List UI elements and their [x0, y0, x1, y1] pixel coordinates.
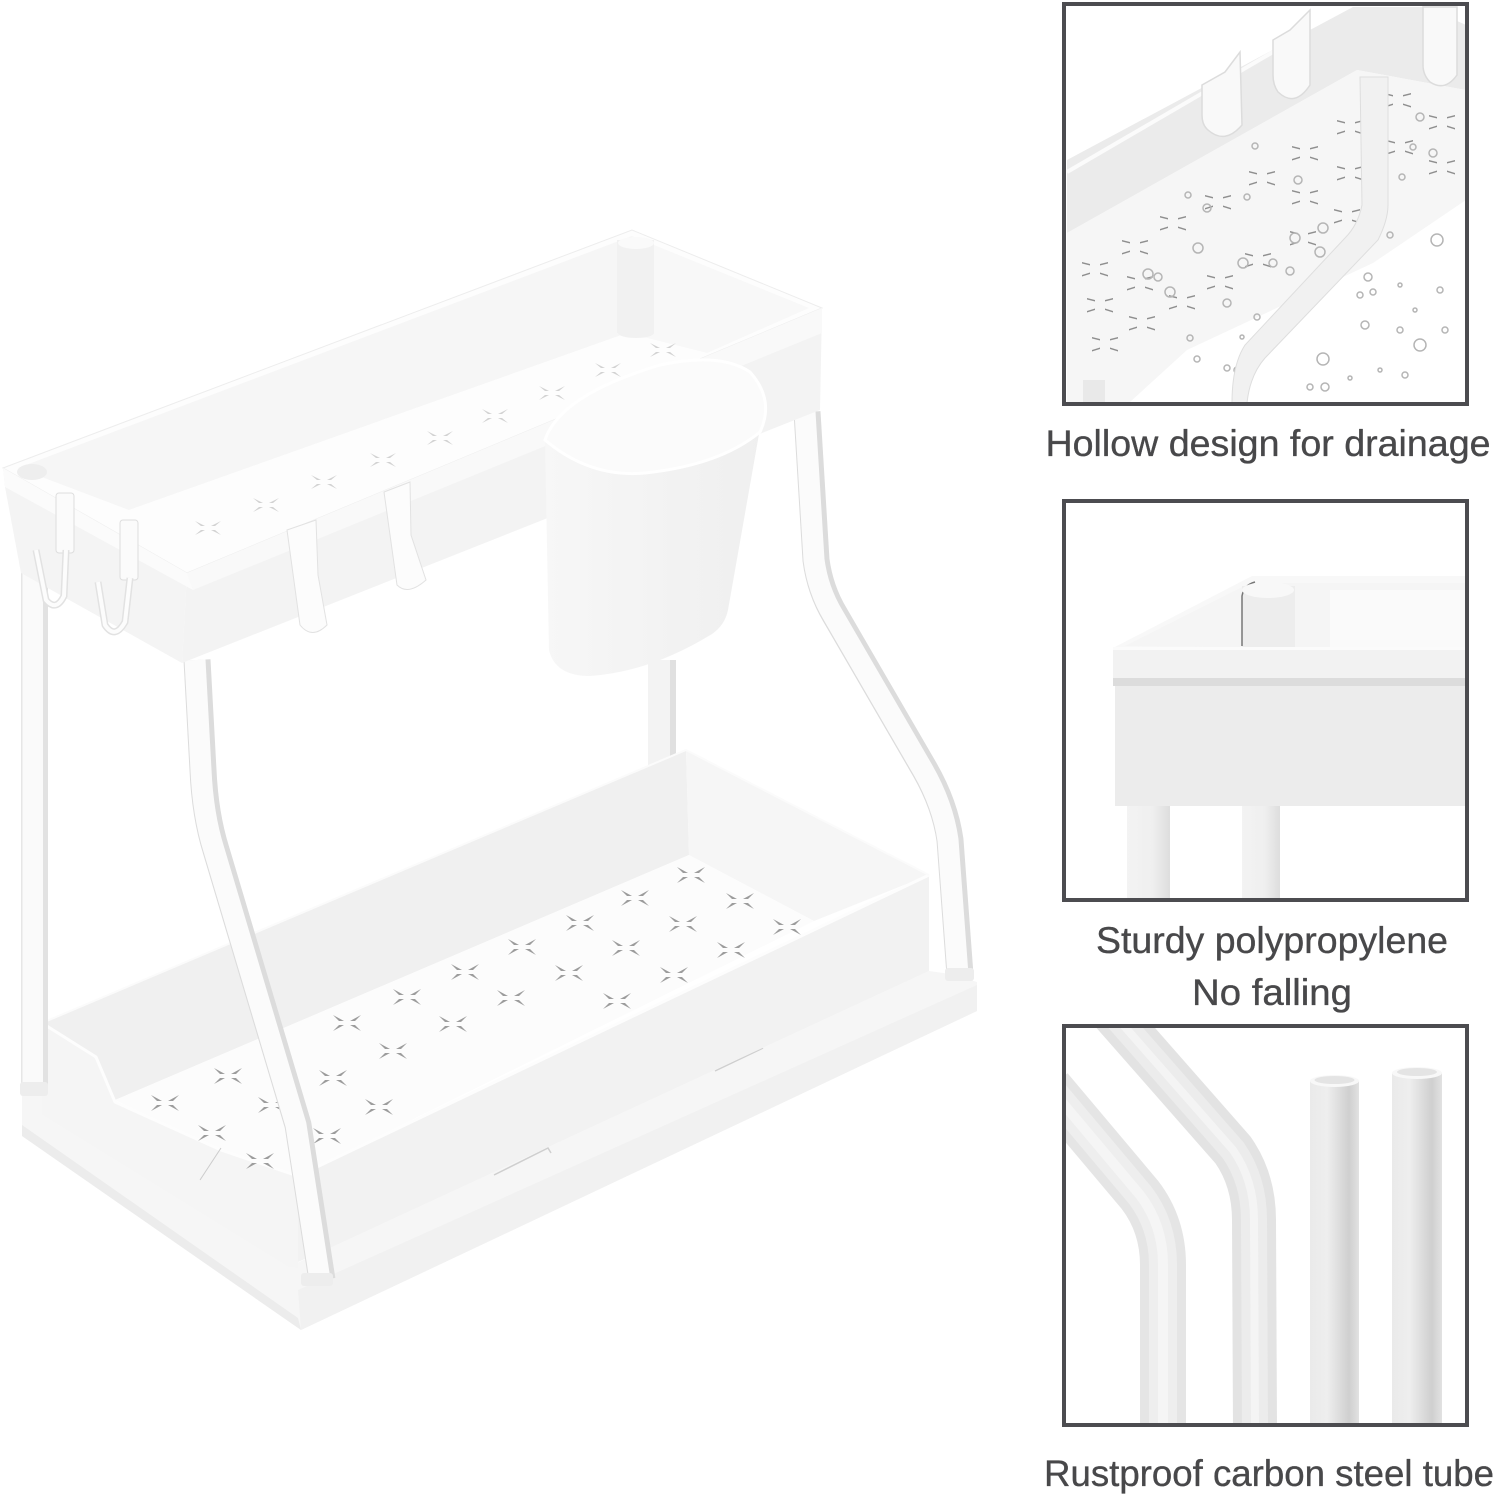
perforation pattern, top shelf	[195, 343, 676, 535]
base plate	[22, 971, 977, 1330]
shelf left wall	[3, 468, 187, 663]
leg stub	[1083, 380, 1105, 404]
panel frame: hollow design	[1064, 4, 1467, 404]
bent pole close-up	[1232, 77, 1388, 403]
bent tube 2	[1110, 1010, 1255, 1430]
panel: hollow design detail	[1066, 6, 1466, 404]
panel: carbon steel tube detail	[1066, 1028, 1442, 1423]
top shelf	[3, 230, 822, 663]
right bent pole	[805, 412, 960, 975]
shelf floor	[129, 333, 707, 566]
tray floor	[115, 855, 814, 1176]
hook 3	[287, 520, 327, 632]
straight tube 1	[1310, 1075, 1359, 1426]
panel frame: polypropylene	[1064, 501, 1467, 900]
front pole foot cap	[301, 1273, 333, 1286]
panel: polypropylene detail	[1113, 581, 1465, 898]
lower tray	[42, 750, 929, 1268]
tray right inner wall	[686, 750, 929, 921]
legs	[1127, 806, 1280, 900]
hooks close-up	[1202, 7, 1457, 136]
detachable cup	[545, 360, 766, 676]
caption: hollow design: Hollow design for drainage	[1046, 423, 1490, 464]
front bent pole	[195, 660, 322, 1280]
panel frame: carbon steel tube	[1064, 1026, 1467, 1425]
tray back wall	[42, 750, 689, 1100]
rear pole behind lower tray	[648, 660, 676, 770]
shelf front wall	[182, 308, 822, 663]
post	[1241, 581, 1256, 646]
shelf back wall	[18, 236, 632, 510]
shelf rim	[3, 230, 822, 573]
hook 2	[98, 520, 138, 632]
hook 1	[36, 493, 74, 605]
straight tube 2	[1392, 1067, 1442, 1426]
hook 4	[384, 482, 426, 589]
shelf right wall	[627, 236, 809, 353]
main product: two-tier shelf organizer	[3, 230, 977, 1330]
right pole foot cap	[945, 968, 974, 981]
shelf underside panel	[1067, 70, 1466, 402]
cup opening	[545, 360, 766, 474]
perforation pattern, lower tray	[151, 867, 801, 1169]
tray left end wall	[42, 1023, 298, 1268]
water droplets	[1143, 113, 1448, 391]
shelf outer wall	[1067, 7, 1466, 233]
left rear pole	[20, 570, 48, 1096]
bent tube 1	[1050, 1088, 1163, 1430]
shelf corner discs	[17, 464, 47, 480]
caption: polypropylene line 2: No falling	[1192, 972, 1352, 1013]
caption: polypropylene line 1: Sturdy polypropylene	[1096, 920, 1448, 961]
shelf rim and inner wall	[1126, 583, 1465, 647]
caption: carbon steel tube: Rustproof carbon steel tube	[1044, 1453, 1494, 1494]
shelf post	[617, 237, 654, 338]
cup body	[545, 370, 765, 676]
perforations	[1082, 93, 1455, 352]
hooks	[36, 482, 426, 632]
shelf front wall	[1113, 647, 1466, 806]
tray front wall	[298, 875, 929, 1262]
